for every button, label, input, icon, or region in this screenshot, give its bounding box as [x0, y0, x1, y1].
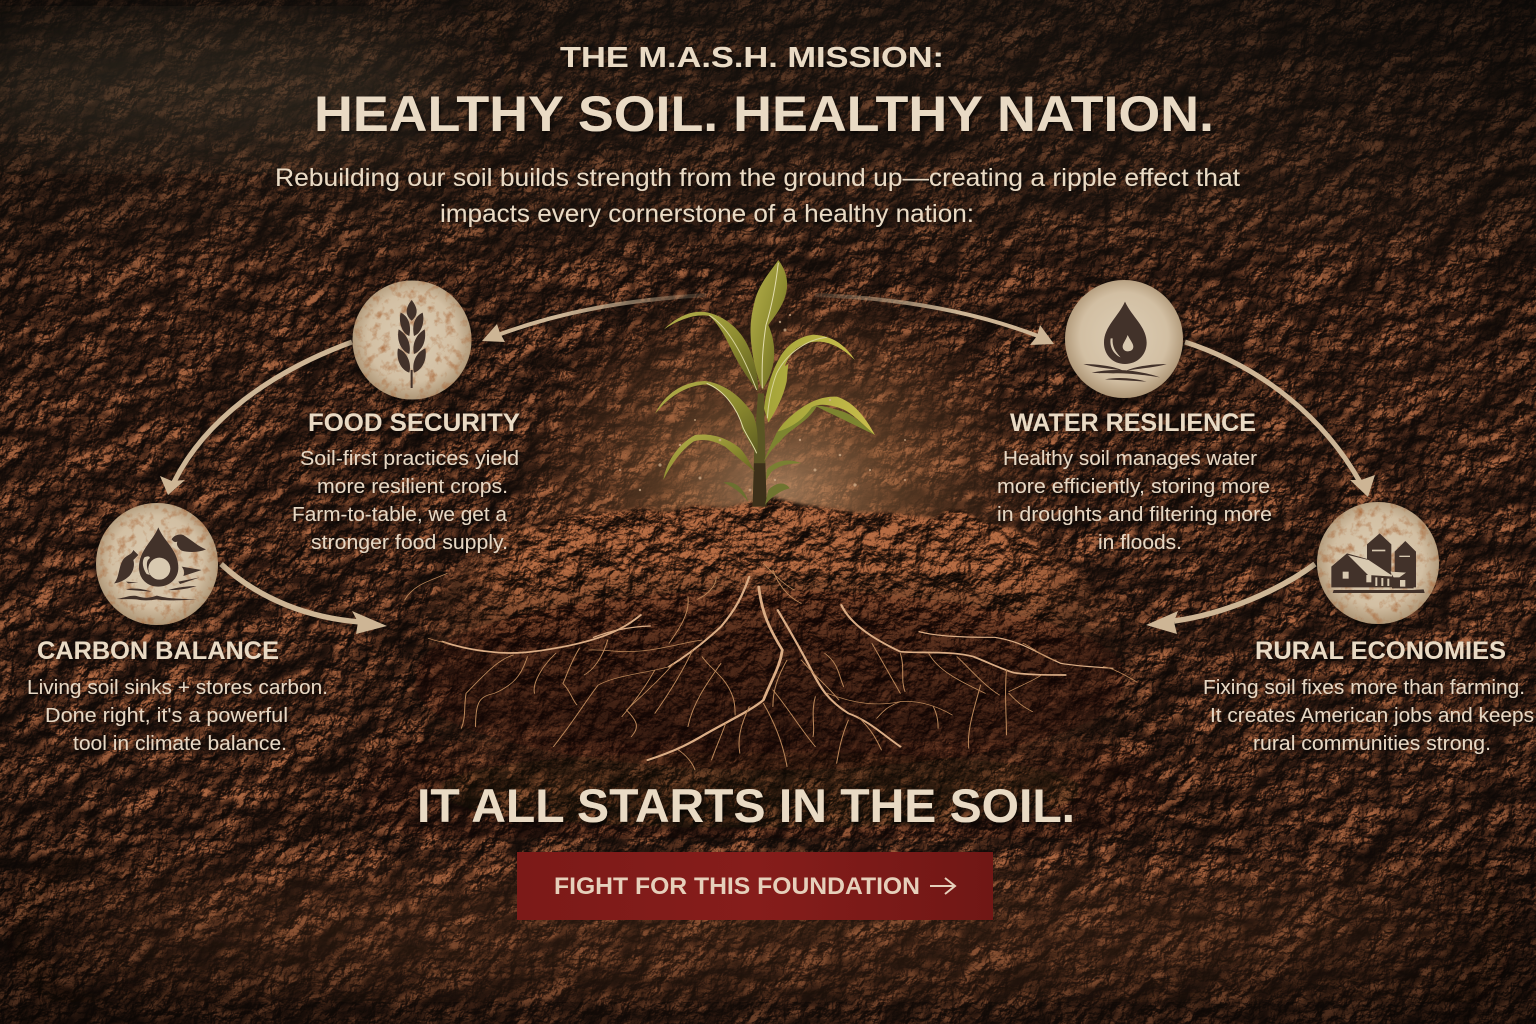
panel: carbon balance [27, 503, 328, 755]
heading: WATER RESILIENCE [1010, 409, 1256, 437]
body text [997, 448, 1272, 554]
icon: arrow [930, 878, 955, 894]
heading: RURAL ECONOMIES [1255, 637, 1506, 665]
body text: Fixing soil fixes more than farming. [1203, 677, 1525, 699]
closing statement: IT ALL STARTS IN THE SOIL. [417, 779, 1075, 832]
title block [275, 42, 1240, 228]
seedling [655, 260, 875, 507]
icon: carbon cycle drop and leaves [96, 503, 218, 625]
body text [292, 448, 519, 554]
body text [1203, 677, 1534, 755]
call to action button [517, 852, 993, 920]
soil dust particles [619, 314, 906, 491]
call to action button: FIGHT FOR THIS FOUNDATION [554, 873, 920, 900]
panel: food security [292, 280, 520, 554]
intro text: Rebuilding our soil builds strength from the ground up—creating a ripple effect that [275, 164, 1240, 192]
body text: Farm-to-table, we get a [292, 504, 508, 526]
body text: Healthy soil manages water [1003, 448, 1257, 470]
stem [753, 393, 767, 507]
body text: Done right, it's a powerful [45, 705, 288, 727]
kicker: THE M.A.S.H. MISSION: [560, 42, 944, 74]
arrow: seedling to water resilience [815, 295, 1054, 345]
panel: rural economies [1203, 502, 1534, 755]
body text: more resilient crops. [317, 476, 508, 498]
body text: stronger food supply. [311, 532, 508, 554]
glow behind seedling [500, 280, 1060, 700]
heading: CARBON BALANCE [37, 637, 279, 665]
roots [405, 563, 1136, 770]
body text: in droughts and filtering more [997, 504, 1272, 526]
body text: more efficiently, storing more [997, 476, 1270, 498]
body text: Living soil sinks + stores carbon. [27, 677, 328, 699]
body text: Soil-first practices yield [300, 448, 519, 470]
main heading: HEALTHY SOIL. HEALTHY NATION. [314, 86, 1214, 142]
icon: wheat [352, 280, 472, 400]
arrow: food security to carbon balance [160, 342, 352, 495]
body text: in floods. [1098, 532, 1182, 554]
icon: water drop [1065, 280, 1183, 398]
icon: farm and silos [1317, 502, 1439, 624]
body text [27, 677, 328, 755]
heading: FOOD SECURITY [308, 409, 520, 437]
panel: water resilience [997, 280, 1272, 554]
body text: It creates American jobs and keeps [1210, 705, 1534, 727]
arrow: seedling to food security [482, 295, 706, 342]
arrow: carbon balance to center [221, 564, 387, 634]
arrow: water resilience to rural economies [1185, 342, 1375, 497]
intro text: impacts every cornerstone of a healthy nation: [440, 200, 974, 228]
intro text [275, 164, 1240, 228]
arrow: rural economies to center [1146, 564, 1315, 634]
soil mound with roots [392, 496, 1150, 798]
body text: tool in climate balance. [73, 733, 287, 755]
body text: rural communities strong. [1253, 733, 1491, 755]
